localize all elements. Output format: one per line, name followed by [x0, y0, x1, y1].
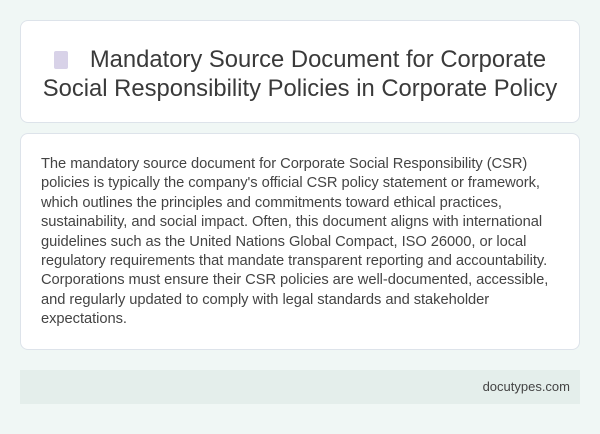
footer text: docutypes.com [483, 379, 570, 394]
panel: title card [20, 20, 580, 123]
text block: sustainability, and social impact. Often, this document aligns with international [41, 214, 542, 230]
text block: guidelines such as the United Nations Global Compact, ISO 26000, or local [41, 234, 526, 250]
text block: which outlines the principles and commitments toward ethical practices, [41, 195, 502, 211]
panel: description [20, 133, 580, 350]
text block [41, 156, 548, 327]
text block: regulatory requirements that mandate transparent reporting and accountability. [41, 253, 547, 269]
icon: document [54, 51, 68, 69]
title: Social Responsibility Policies in Corporate Policy [43, 75, 557, 102]
text block: Corporations must ensure their CSR policies are well-documented, accessible, [41, 272, 548, 288]
footer [20, 370, 580, 404]
text block: expectations. [41, 311, 127, 327]
text block: and regularly updated to comply with legal standards and stakeholder [41, 292, 489, 308]
text block: The mandatory source document for Corporate Social Responsibility (CSR) [41, 156, 527, 172]
title [43, 46, 558, 102]
text block: policies is typically the company's official CSR policy statement or framework, [41, 175, 540, 191]
title: Mandatory Source Document for Corporate [90, 46, 546, 73]
